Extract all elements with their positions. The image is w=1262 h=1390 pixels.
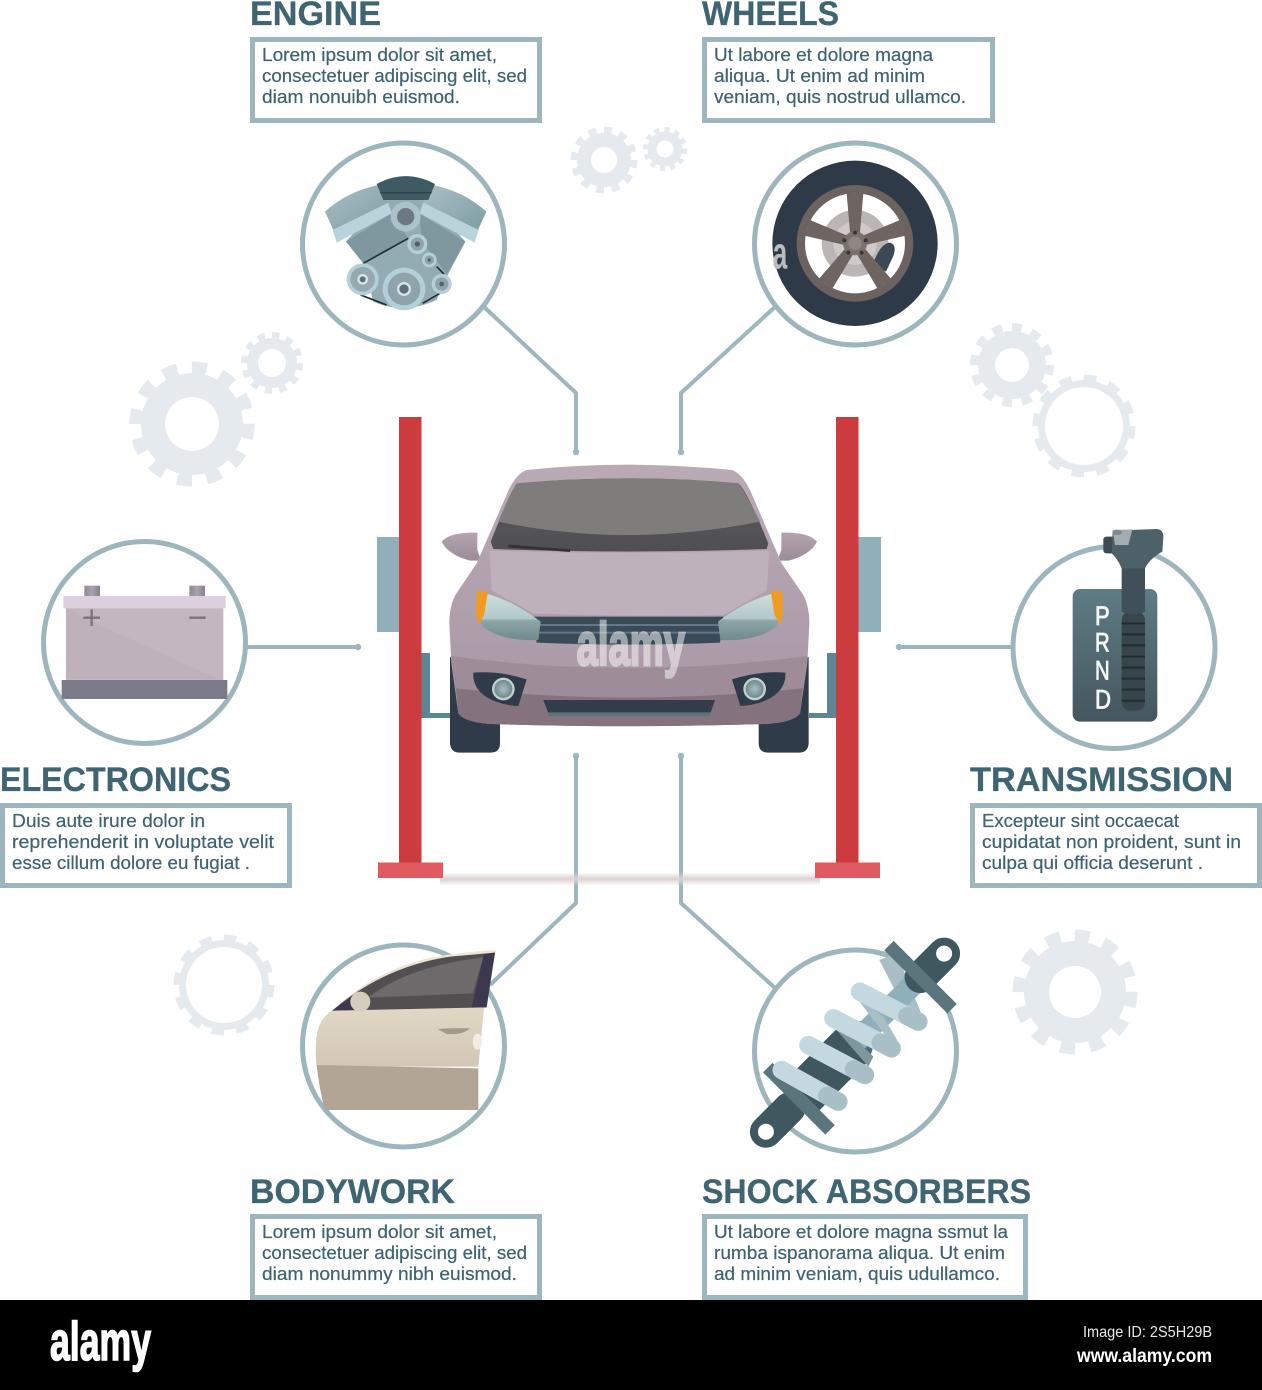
lower grille (543, 700, 715, 716)
connector: shock absorbers (678, 753, 775, 988)
gear: lower right (1019, 936, 1131, 1048)
right headlight (718, 591, 783, 640)
transmission circle and icon (1013, 529, 1215, 748)
connector: bodywork (490, 753, 579, 985)
text box: transmission (972, 806, 1260, 886)
left lift arm (421, 653, 450, 718)
bodywork circle and icon (302, 945, 504, 1147)
wheels circle and icon (754, 143, 956, 345)
icon: battery (62, 586, 227, 699)
car (442, 465, 817, 753)
text box: shock absorbers: ad minim veniam, quis udullamco. (714, 1264, 1000, 1284)
wiper (508, 546, 570, 551)
gear: lower left ring (177, 938, 271, 1032)
icon: shock absorber (723, 911, 987, 1175)
shock absorbers circle and icon (723, 911, 987, 1175)
heading: electronics: ELECTRONICS (0, 761, 231, 799)
text box: electronics: esse cillum dolore eu fugiat . (12, 853, 250, 873)
icon: gear shifter: D (1095, 684, 1111, 714)
left headlight (476, 591, 541, 640)
text box: shock absorbers (704, 1216, 1026, 1298)
icon: gear shifter: N (1095, 655, 1110, 685)
right post (836, 417, 858, 863)
left foot (378, 862, 443, 878)
text box: transmission: Excepteur sint occaecat (982, 811, 1179, 831)
text box: transmission: culpa qui officia deserunt . (982, 853, 1203, 873)
gear: left large (136, 368, 248, 480)
text box: electronics (2, 806, 290, 886)
gear: top centre large (574, 130, 634, 190)
right foot (815, 862, 880, 878)
image id: Image ID: 2S5H29B (1083, 1324, 1212, 1341)
text box: electronics: Duis aute irure dolor in (12, 811, 205, 831)
grille (533, 617, 723, 645)
car lift (377, 417, 881, 886)
right mirror (777, 533, 817, 561)
text box: wheels: veniam, quis nostrud ullamco. (714, 87, 966, 107)
icon: wheel (772, 161, 938, 326)
gear: top centre small (646, 130, 684, 168)
gear: right ring (1036, 378, 1132, 474)
left fog lamp (473, 672, 527, 706)
engine circle and icon (302, 143, 504, 345)
connector: transmission (896, 644, 1013, 650)
left mirror (442, 533, 481, 561)
text box: engine: diam nonuibh euismod. (262, 87, 460, 107)
electronics circle and icon (44, 542, 246, 744)
footer bar (0, 1300, 1262, 1390)
windshield reflection (498, 478, 760, 535)
icon: gear shifter: P (1095, 601, 1110, 631)
connector: electronics (245, 644, 361, 650)
text box: engine: Lorem ipsum dolor sit amet, (262, 45, 497, 65)
footer logo: alamy (50, 1310, 151, 1372)
left pad (377, 537, 400, 632)
icon: car door (316, 950, 496, 1110)
gear: left small (244, 335, 300, 391)
text box: bodywork: consectetuer adipiscing elit, sed (262, 1243, 527, 1263)
heading: bodywork: BODYWORK (250, 1173, 455, 1211)
right lift arm (809, 653, 836, 718)
icon: gear shifter: R (1095, 628, 1110, 658)
heading: transmission: TRANSMISSION (970, 761, 1233, 799)
website: www.alamy.com (1076, 1346, 1212, 1367)
text box: engine: consectetuer adipiscing elit, sed (262, 66, 527, 86)
right pad (858, 537, 881, 632)
watermark fragment: a (773, 227, 788, 278)
text box: bodywork: Lorem ipsum dolor sit amet, (262, 1222, 497, 1242)
text box: wheels (704, 40, 992, 120)
hood (489, 551, 769, 616)
text box: bodywork (252, 1216, 540, 1298)
text box: wheels: Ut labore et dolore magna (714, 45, 934, 65)
text box: shock absorbers: rumba ispanorama aliqua. Ut enim (714, 1243, 1005, 1263)
connector: wheels (678, 306, 776, 455)
tyres (450, 657, 809, 753)
icon: engine (325, 176, 486, 310)
text box: electronics: reprehenderit in voluptate velit (12, 832, 274, 852)
watermark: alamy (577, 611, 685, 678)
text box: bodywork: diam nonummy nibh euismod. (262, 1264, 517, 1284)
right fog lamp (732, 672, 785, 706)
left post (399, 417, 422, 863)
lower bumper (451, 656, 808, 726)
gear: right solid (974, 327, 1050, 403)
icon: gear shifter (1073, 529, 1163, 722)
text box: transmission: cupidatat non proident, sunt in (982, 832, 1241, 852)
text box: engine (252, 40, 540, 120)
heading: shock absorbers: SHOCK ABSORBERS (702, 1173, 1031, 1211)
floor shadow (440, 872, 820, 886)
body shell (449, 465, 809, 726)
text box: shock absorbers: Ut labore et dolore magna ssmut la (714, 1222, 1009, 1242)
windshield (491, 478, 768, 551)
text box: wheels: aliqua. Ut enim ad minim (714, 66, 925, 86)
connector: engine (483, 306, 579, 455)
bumper shadow (456, 688, 803, 726)
